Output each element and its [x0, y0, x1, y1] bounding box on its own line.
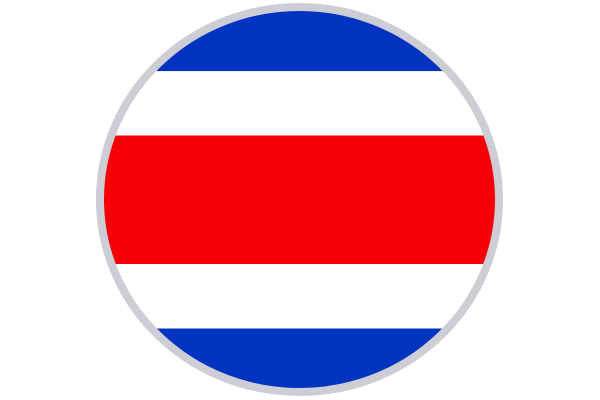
central red stripe — [100, 136, 500, 264]
lower white stripe — [100, 264, 500, 328]
upper white stripe — [156, 71, 443, 72]
flag stripes — [100, 0, 500, 400]
grey ring border — [100, 7, 499, 392]
icon: circular flag of Costa Rica — [96, 3, 503, 396]
top blue stripe — [156, 11, 443, 72]
bottom blue stripe — [157, 328, 442, 388]
